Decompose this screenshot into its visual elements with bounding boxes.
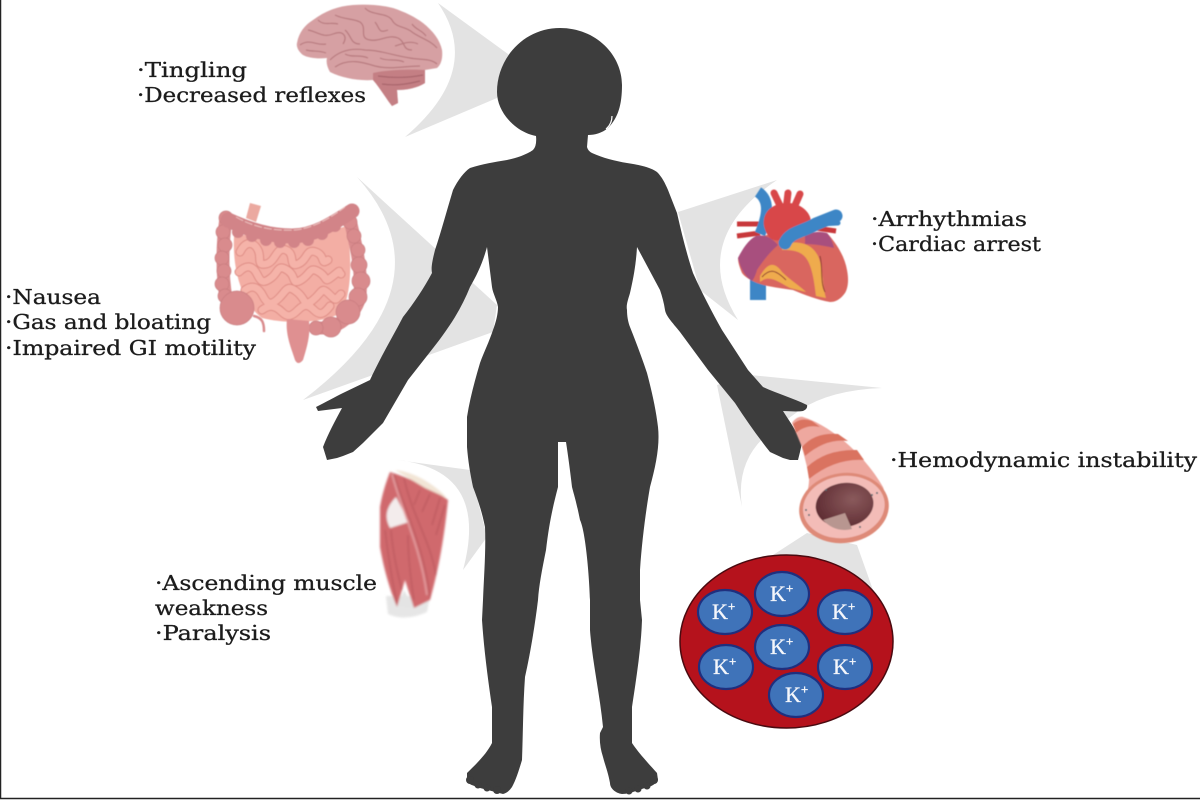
vessel opening xyxy=(795,467,893,549)
panel: blood with potassium ions: K xyxy=(770,581,786,606)
transverse colon xyxy=(228,211,352,236)
esophagus stub xyxy=(246,203,261,222)
text: muscle symptoms: weakness xyxy=(155,596,268,620)
coronary fat xyxy=(760,242,826,298)
icon: heart xyxy=(737,192,848,302)
text: heart symptoms: ·Cardiac arrest xyxy=(871,232,1042,256)
arrow wedge: intestine to torso xyxy=(303,177,497,400)
vessel bands xyxy=(793,420,864,479)
panel: blood with potassium ions: + xyxy=(848,599,855,614)
panel: blood with potassium ions: K xyxy=(713,654,729,679)
rectum xyxy=(287,319,309,363)
pulmonary artery xyxy=(785,216,836,243)
arrow wedge: heart to arm xyxy=(678,180,777,320)
human body silhouette xyxy=(316,28,807,794)
muscle tissue xyxy=(380,472,448,608)
panel: blood with potassium ions: K xyxy=(832,599,848,624)
text: heart symptoms: ·Arrhythmias xyxy=(871,207,1027,231)
hair highlight xyxy=(606,116,612,129)
panel: blood with potassium ions: + xyxy=(786,581,793,596)
panel: blood with potassium ions xyxy=(680,555,893,728)
arrow wedge: brain to head xyxy=(405,3,512,137)
text: gastrointestinal symptoms: ·Impaired GI motility xyxy=(5,336,256,360)
text: brain symptoms: ·Decreased reflexes xyxy=(137,83,366,107)
panel: blood with potassium ions: + xyxy=(786,634,793,649)
arrow wedge: vessel to hand xyxy=(717,375,882,507)
panel: blood with potassium ions: K xyxy=(833,654,849,679)
arrow wedge: blood to vessel xyxy=(773,533,873,590)
text: brain symptoms: ·Tingling xyxy=(137,58,247,82)
superior vena cava xyxy=(758,192,766,234)
text: vascular symptom: ·Hemodynamic instability xyxy=(890,448,1197,472)
heart body xyxy=(738,232,848,302)
text: brain symptoms xyxy=(137,58,366,107)
icon: blood vessel xyxy=(792,417,893,549)
icon: brain xyxy=(297,5,442,106)
small intestine xyxy=(234,226,350,322)
arrow wedge: muscle to leg xyxy=(397,460,487,570)
toes xyxy=(466,776,474,784)
icon: intestines xyxy=(215,203,370,363)
text: muscle symptoms: ·Ascending muscle xyxy=(155,571,377,595)
cecum xyxy=(220,291,254,325)
knee xyxy=(386,596,430,618)
panel: blood with potassium ions: K xyxy=(712,599,728,624)
text: muscle symptoms xyxy=(155,571,377,645)
colon lumps xyxy=(215,211,370,337)
inferior vena cava xyxy=(750,278,766,300)
panel: blood with potassium ions: + xyxy=(729,654,736,669)
aorta xyxy=(764,203,811,240)
panel: blood with potassium ions: + xyxy=(728,599,735,614)
text: gastrointestinal symptoms: ·Gas and bloating xyxy=(5,310,211,334)
panel: blood with potassium ions: K xyxy=(785,682,801,707)
colon body xyxy=(223,218,360,328)
text: heart symptoms xyxy=(871,207,1042,256)
appendix xyxy=(254,316,264,331)
heart back vessels xyxy=(737,224,836,236)
text: muscle symptoms: ·Paralysis xyxy=(155,621,271,645)
icon: muscle xyxy=(380,470,448,618)
panel: blood with potassium ions: K xyxy=(770,634,786,659)
panel: blood with potassium ions: + xyxy=(801,682,808,697)
text: gastrointestinal symptoms xyxy=(5,285,256,360)
panel: blood with potassium ions: + xyxy=(849,654,856,669)
text: gastrointestinal symptoms: ·Nausea xyxy=(5,285,101,309)
pale cap xyxy=(395,470,447,498)
